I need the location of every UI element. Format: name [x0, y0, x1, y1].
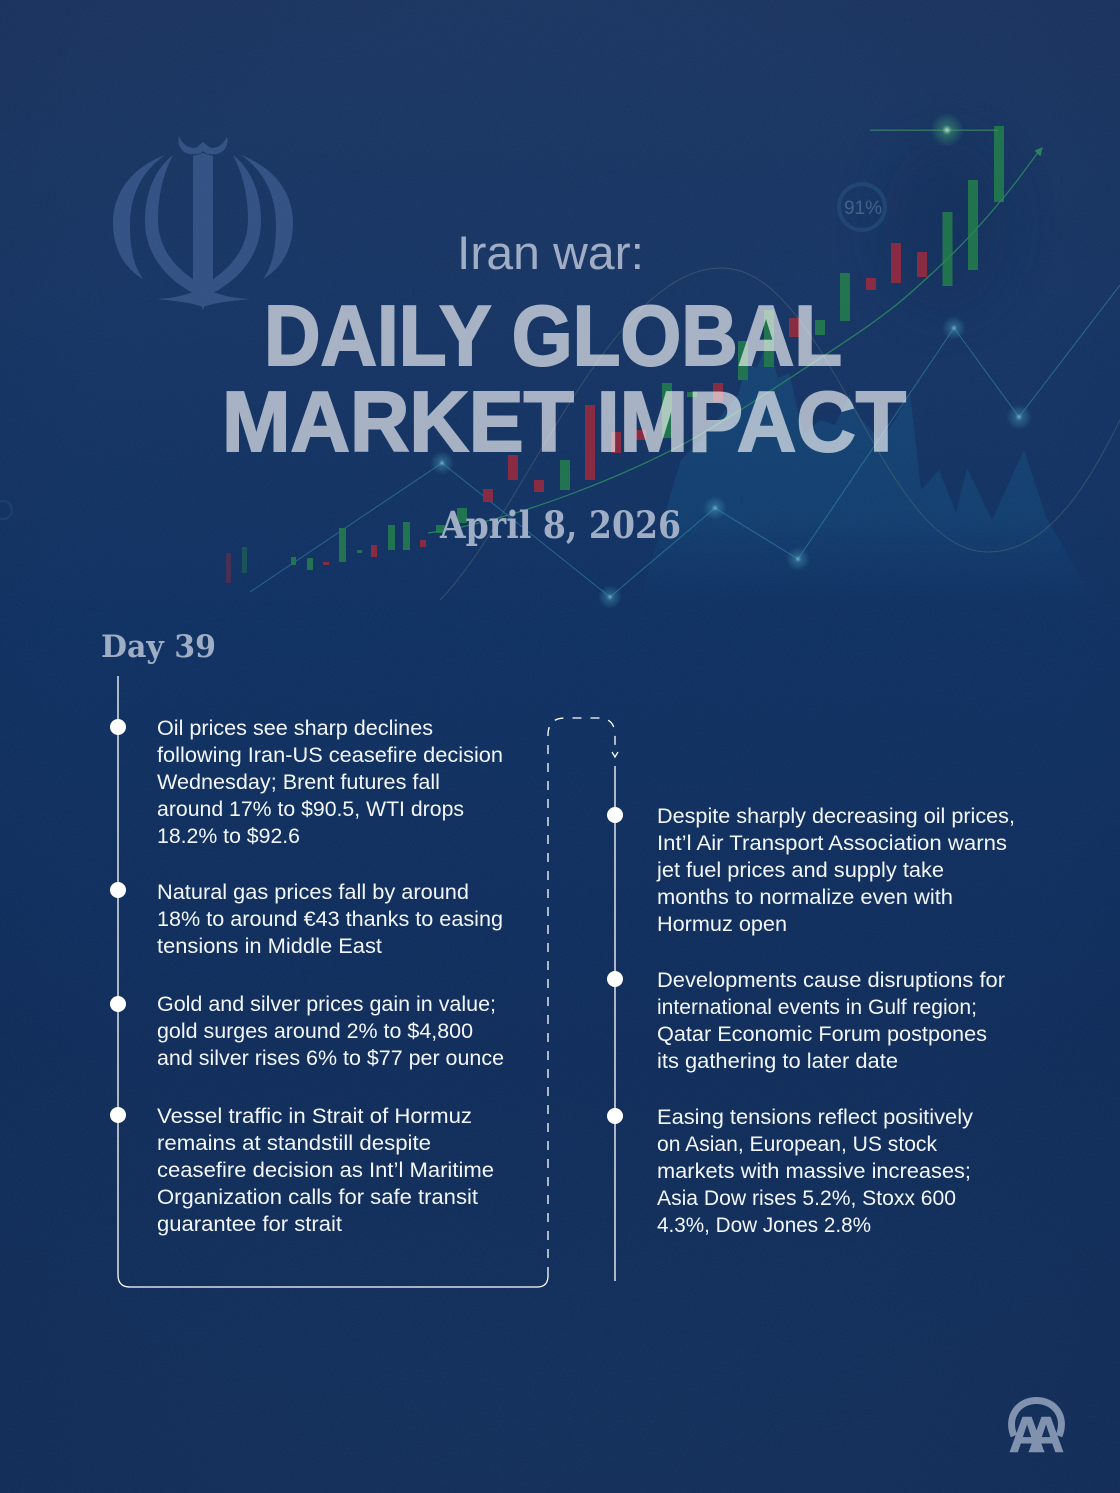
text: jet fuel: Int’l Air Transport Association warns — [657, 831, 1007, 855]
text: gold and silver: gold surges around 2% to $4,800 — [157, 1019, 473, 1043]
area chart — [640, 343, 1100, 610]
faint circle at left edge — [0, 501, 12, 519]
subtitle: Iran war: — [457, 226, 644, 279]
percentage ring — [839, 184, 885, 230]
text: international events: international events in Gulf region; — [657, 995, 977, 1019]
text: stock markets: on Asian, European, US stock — [657, 1132, 937, 1156]
text: jet fuel — [656, 804, 1015, 936]
text: oil prices — [157, 716, 503, 848]
text: vessel traffic: ceasefire decision as Int’l Maritime — [157, 1158, 494, 1182]
text: oil prices: Wednesday; Brent futures fall — [157, 770, 440, 794]
text: vessel traffic: Vessel traffic in Strait of Hormuz — [157, 1104, 472, 1128]
star flare — [870, 113, 998, 147]
network nodes — [430, 316, 1032, 609]
timeline connector — [118, 676, 618, 1287]
text: jet fuel: jet fuel prices and supply take — [656, 858, 944, 882]
network lines — [250, 285, 1120, 597]
text: natural gas — [157, 880, 503, 958]
text: international events: its gathering to later date — [657, 1049, 898, 1073]
text: gold and silver: and silver rises 6% to $77 per ounce — [157, 1046, 504, 1070]
text: oil prices: following Iran-US ceasefire decision — [157, 743, 503, 767]
text: natural gas: 18% to around €43 thanks to easing — [157, 907, 503, 931]
text: stock markets — [657, 1105, 973, 1237]
candlesticks green — [242, 126, 1004, 573]
day heading: Day 39 — [101, 629, 216, 665]
main title — [222, 289, 906, 470]
trend arrow — [428, 148, 1042, 533]
text: stock markets: 4.3%, Dow Jones 2.8% — [657, 1213, 871, 1237]
text: jet fuel: Despite sharply decreasing oil prices, — [657, 804, 1015, 828]
text: oil prices: Oil prices see sharp declines — [157, 716, 433, 740]
text: oil prices: 18.2% to $92.6 — [157, 824, 300, 848]
text: stock markets: markets with massive increases; — [657, 1159, 971, 1183]
text: international events: Qatar Economic Forum postpones — [657, 1022, 987, 1046]
text: natural gas: tensions in Middle East — [157, 934, 382, 958]
logo: AA: AA — [1009, 1407, 1064, 1463]
text: jet fuel: months to normalize even with — [657, 885, 953, 909]
timeline dots — [110, 719, 623, 1124]
market chart background — [226, 113, 1120, 610]
text: international events: Developments cause disruptions for — [657, 968, 1005, 992]
text: vessel traffic: remains at standstill despite — [157, 1131, 431, 1155]
text: gold and silver: Gold and silver prices gain in value; — [157, 992, 496, 1016]
percentage ring: 91% — [844, 198, 882, 219]
main title: MARKET IMPACT — [222, 375, 906, 470]
text: stock markets: Easing tensions reflect positively — [657, 1105, 973, 1129]
text: natural gas: Natural gas prices fall by around — [157, 880, 469, 904]
text: jet fuel: Hormuz open — [657, 912, 787, 936]
candlesticks red — [226, 243, 927, 583]
text: international events — [657, 968, 1005, 1073]
text: vessel traffic — [157, 1104, 494, 1236]
text: vessel traffic: Organization calls for safe transit — [157, 1185, 478, 1209]
text: vessel traffic: guarantee for strait — [157, 1212, 342, 1236]
text: oil prices: around 17% to $90.5, WTI drops — [157, 797, 464, 821]
emblem of Iran — [113, 136, 293, 310]
text: stock markets: Asia Dow rises 5.2%, Stoxx 600 — [657, 1186, 956, 1210]
main title: DAILY GLOBAL — [264, 289, 842, 384]
sine curve — [440, 268, 1120, 600]
text: gold and silver — [157, 992, 504, 1070]
date: April 8, 2026 — [439, 503, 681, 547]
